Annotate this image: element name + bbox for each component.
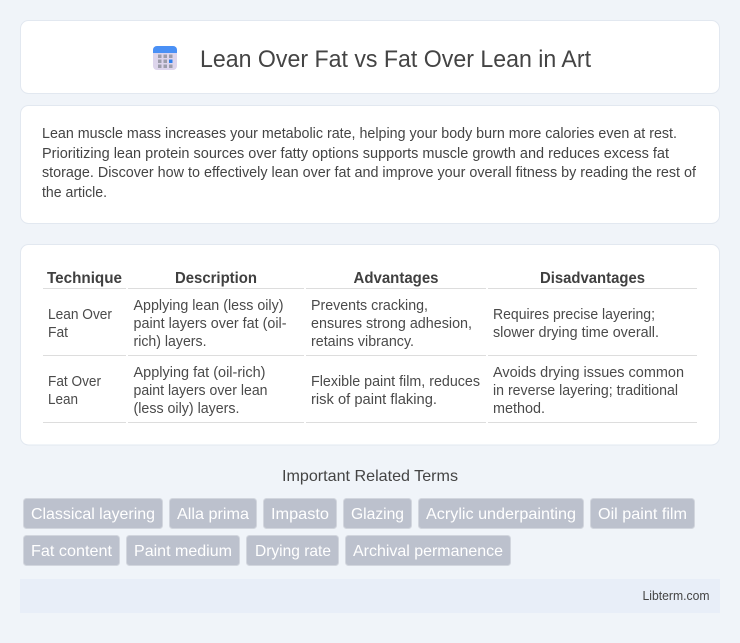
table row: lean over fat: rich) layers. <box>134 334 206 350</box>
table row: lean over fat: paint layers over fat (oil- <box>134 316 287 332</box>
table row: lean over fat: Requires precise layering; <box>493 307 655 323</box>
table row: lean over fat: Prevents cracking, <box>311 298 428 314</box>
intro text <box>42 125 697 201</box>
icon: calendar <box>153 46 177 70</box>
table row: fat over lean: Lean <box>48 392 78 408</box>
table row: lean over fat <box>43 298 697 356</box>
intro text: Prioritizing lean protein sources over fatty options supports muscle growth and reduces excess fat <box>42 145 670 162</box>
intro text: Lean muscle mass increases your metabolic rate, helping your body burn more calories even at rest. <box>42 125 677 142</box>
intro text: the article. <box>42 184 107 201</box>
panel: comparison table <box>20 244 720 445</box>
related terms tags: Drying rate <box>255 543 331 560</box>
table header: Description <box>175 270 257 287</box>
table row: fat over lean: (less oily) layers. <box>134 401 240 417</box>
table row: fat over lean: Fat Over <box>48 374 101 390</box>
panel: header <box>20 20 720 94</box>
table row: fat over lean: Applying fat (oil-rich) <box>134 365 266 381</box>
table header <box>43 270 697 289</box>
related terms heading: Important Related Terms <box>282 468 458 485</box>
table row: lean over fat: Fat <box>48 325 68 341</box>
table row: fat over lean: risk of paint flaking. <box>311 392 437 408</box>
panel: intro <box>20 106 720 224</box>
related terms tags: Acrylic underpainting <box>426 506 576 523</box>
table row: fat over lean: Flexible paint film, reduces <box>311 374 480 390</box>
related terms tags: Archival permanence <box>353 543 503 560</box>
footer <box>20 579 720 613</box>
footer: Libterm.com <box>642 588 710 603</box>
related terms tags: Oil paint film <box>598 506 687 523</box>
related terms tags: Glazing <box>351 506 404 523</box>
table row: fat over lean: in reverse layering; traditional <box>493 383 678 399</box>
table row: lean over fat: Applying lean (less oily) <box>134 298 284 314</box>
table header: Technique <box>47 270 122 287</box>
related terms tags: Classical layering <box>31 506 155 523</box>
table row: fat over lean <box>43 365 697 423</box>
related terms tags: Alla prima <box>177 506 249 523</box>
related terms tags: Impasto <box>271 506 329 523</box>
related terms tags <box>24 498 694 566</box>
table row: fat over lean: Avoids drying issues common <box>493 365 684 381</box>
table row: lean over fat: retains vibrancy. <box>311 334 414 350</box>
title: Lean Over Fat vs Fat Over Lean in Art <box>200 46 591 73</box>
related terms tags: Paint medium <box>134 543 232 560</box>
table header: Advantages <box>354 270 439 287</box>
table row: fat over lean: paint layers over lean <box>134 383 268 399</box>
table row: fat over lean: method. <box>493 401 545 417</box>
intro text: storage. Discover how to effectively lean over fat and improve your overall fitness by reading the rest of <box>42 164 697 181</box>
related terms tags: Fat content <box>31 543 113 560</box>
table row: lean over fat: Lean Over <box>48 307 112 323</box>
table row: lean over fat: slower drying time overall. <box>493 325 659 341</box>
table header: Disadvantages <box>540 270 645 287</box>
table row: lean over fat: ensures strong adhesion, <box>311 316 472 332</box>
